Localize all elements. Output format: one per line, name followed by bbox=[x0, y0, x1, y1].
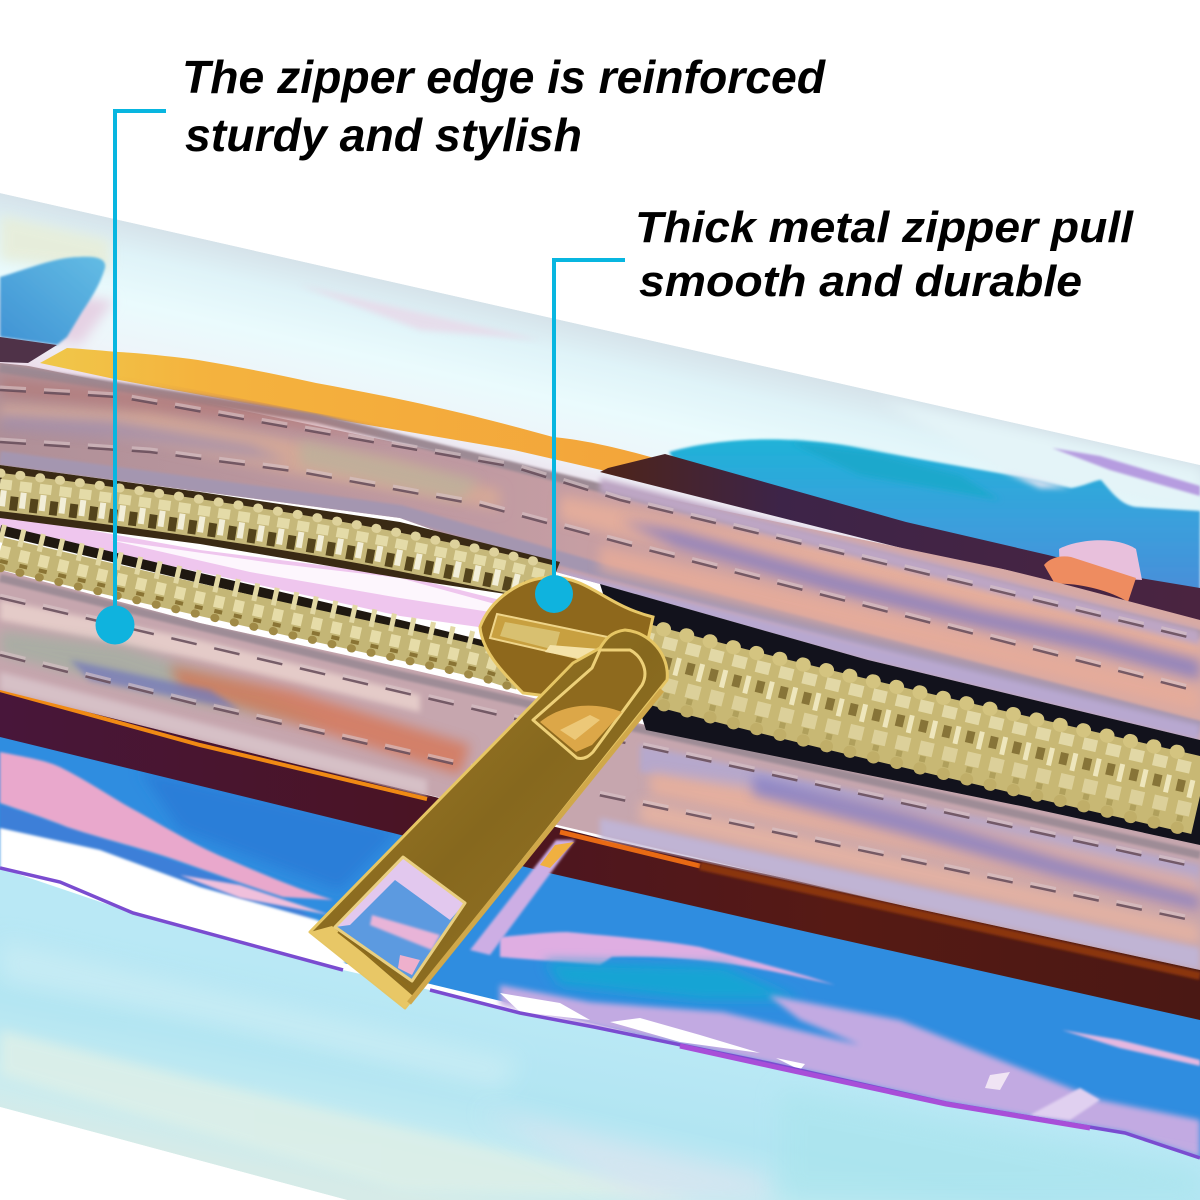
lower zipper trim bbox=[0, 565, 1200, 975]
callout line: metal zipper pull bbox=[554, 260, 625, 590]
lower left zipper teeth bbox=[0, 530, 520, 689]
pink reflection right bbox=[500, 932, 835, 985]
dark maroon reflection bbox=[600, 454, 1200, 630]
iridescent stripes right bbox=[560, 495, 1200, 665]
white band left bbox=[0, 828, 345, 975]
pink and orange blob right bbox=[1044, 540, 1142, 602]
callout text: zipper edge bbox=[182, 51, 826, 161]
callout text: metal zipper pull: Thick metal zipper pull bbox=[635, 203, 1134, 252]
dark tape behind right zipper bbox=[600, 584, 1200, 845]
orange reflection bbox=[40, 348, 668, 472]
callout text: zipper edge: The zipper edge is reinforced bbox=[182, 51, 826, 103]
pink reflection left bbox=[0, 752, 333, 900]
dark reflection top left bbox=[0, 337, 57, 363]
upper left zipper teeth bbox=[0, 473, 550, 594]
zipper slider bbox=[480, 577, 653, 707]
dark tape behind upper left zipper bbox=[0, 465, 560, 600]
tab front bevel bbox=[310, 926, 413, 1008]
lower pale panel bbox=[0, 868, 1200, 1200]
stitching rows bbox=[0, 596, 1200, 922]
callout line: zipper edge bbox=[115, 111, 166, 625]
callout: zipper edge bbox=[96, 51, 826, 644]
lower clear panel bbox=[0, 730, 1200, 1170]
callout text: metal zipper pull: smooth and durable bbox=[639, 257, 1082, 306]
edge bands bbox=[0, 368, 1200, 635]
slider bridge bbox=[488, 612, 608, 659]
opening highlight bbox=[110, 540, 495, 612]
lavender reflection right bbox=[500, 985, 1200, 1158]
blue blob top left bbox=[0, 257, 105, 345]
dark strip under lower trim bbox=[0, 688, 1200, 1020]
tab body bbox=[310, 630, 667, 1008]
callout text: zipper edge: sturdy and stylish bbox=[185, 109, 582, 161]
reflection beside pull tab bbox=[470, 840, 575, 955]
upper window of pull tab bbox=[533, 650, 645, 758]
zipper opening bbox=[0, 514, 500, 630]
lower window rim bbox=[335, 857, 465, 981]
teal reflection bbox=[669, 439, 1200, 600]
purple edge line bbox=[0, 868, 1200, 1158]
tab right highlight bbox=[409, 690, 662, 1003]
right zipper teeth bbox=[640, 623, 1200, 833]
orange edge line bbox=[0, 690, 1200, 976]
upper clear panel bbox=[0, 193, 1200, 588]
callout text: metal zipper pull bbox=[635, 203, 1134, 306]
white highlights right bbox=[500, 993, 590, 1020]
callout: metal zipper pull bbox=[535, 203, 1134, 613]
upper zipper trim bbox=[0, 360, 1200, 745]
callout dot: metal zipper pull bbox=[535, 575, 573, 613]
callout dot: zipper edge bbox=[96, 606, 134, 644]
iridescent stripes right bbox=[640, 745, 1200, 890]
lower window of pull tab bbox=[335, 857, 465, 981]
lavender streak bbox=[1052, 448, 1200, 496]
zipper pull tab bbox=[310, 630, 667, 1008]
stitching rows bbox=[0, 388, 1200, 692]
iridescent stripes left bbox=[0, 405, 500, 510]
